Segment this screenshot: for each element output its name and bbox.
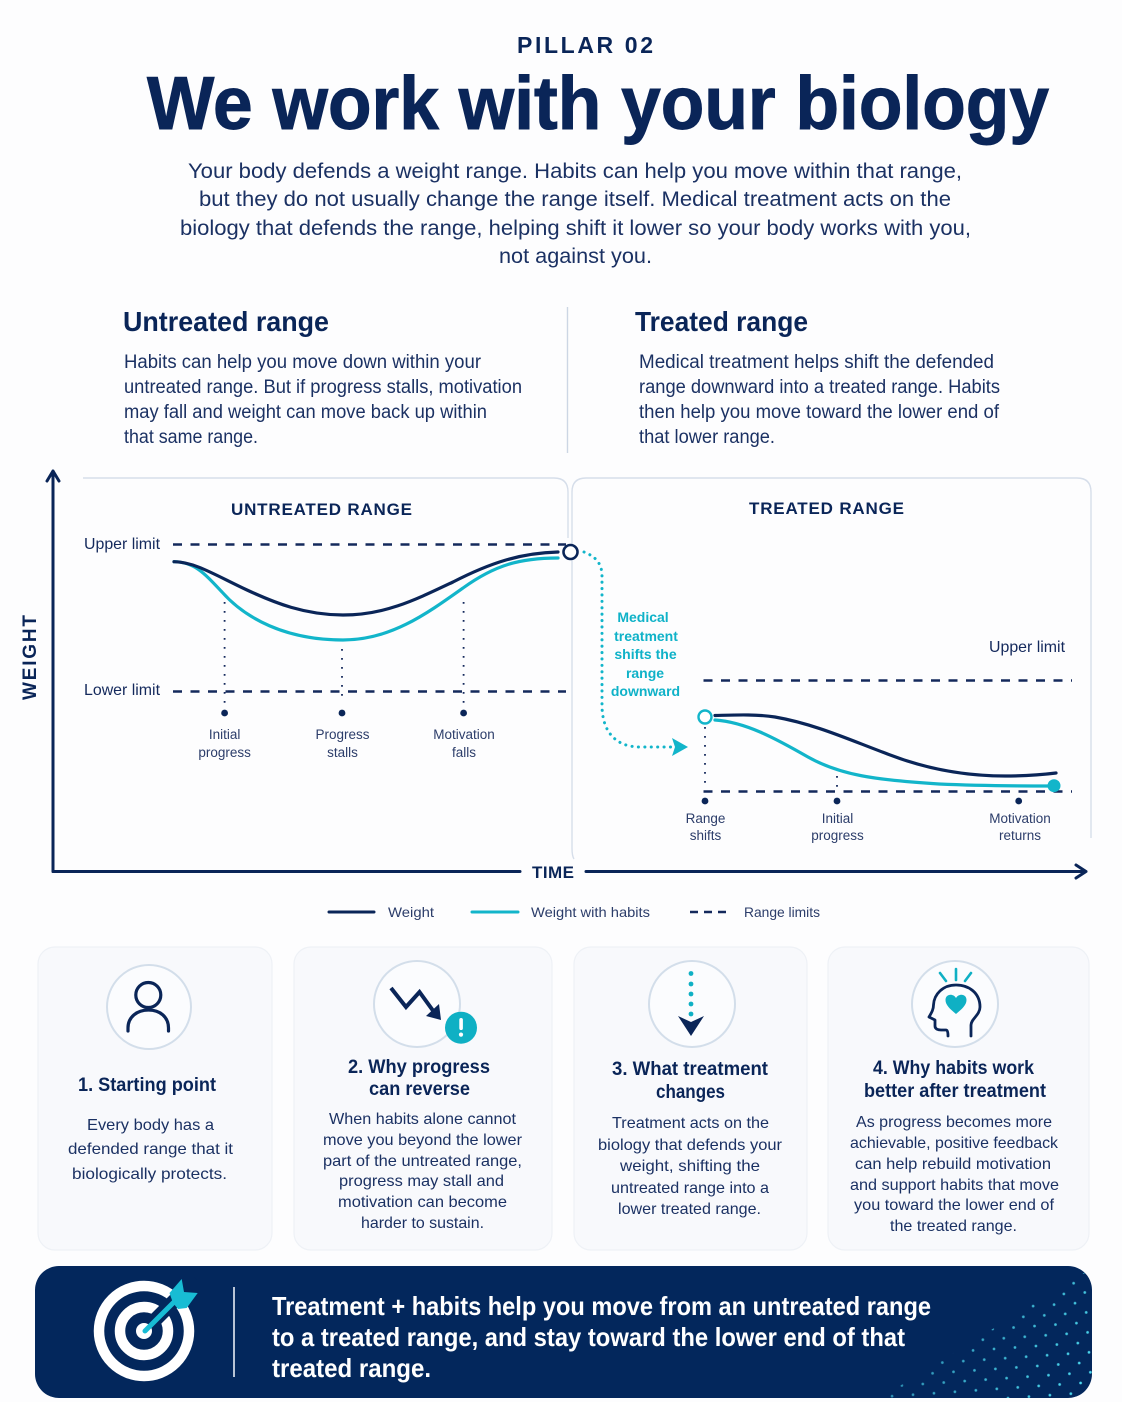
card body: move you beyond the lower	[323, 1132, 523, 1149]
range limit lines	[704, 680, 1072, 792]
panel: treated range chart	[572, 478, 1091, 859]
legend: Range limits	[744, 904, 820, 920]
description: untreated range: Habits can help you move down within your	[124, 352, 482, 373]
icon: person	[107, 965, 191, 1049]
banner text	[272, 1291, 931, 1383]
intro paragraph: Your body defends a weight range. Habits can help you move within that range,	[188, 160, 962, 183]
card body: harder to sustain.	[361, 1215, 484, 1232]
callout: medical treatment shifts the range downward: treatment	[614, 628, 678, 644]
intro paragraph: but they do not usually change the range itself. Medical treatment acts on the	[199, 188, 951, 211]
card body: biology that defends your	[598, 1137, 783, 1154]
description: treated range	[639, 352, 1000, 448]
marker label: progress stalls: stalls	[327, 745, 358, 760]
callout: medical treatment shifts the range downward: range	[626, 665, 664, 681]
panel: 4. why habits work better after treatment	[828, 947, 1089, 1250]
icon: head with heart	[912, 961, 998, 1047]
banner text: treated range.	[272, 1353, 431, 1383]
intro paragraph	[180, 160, 971, 268]
heading: untreated range: Untreated range	[123, 306, 329, 337]
transition point: untreated top	[564, 545, 578, 559]
marker label: range shifts	[686, 811, 725, 843]
legend	[329, 904, 820, 920]
card body: lower treated range.	[618, 1201, 761, 1218]
title: We work with your biology	[147, 61, 1049, 145]
chart heading: untreated range: UNTREATED RANGE	[231, 500, 412, 519]
icon: dotted down arrow	[649, 961, 735, 1047]
marker label: initial progress: Initial	[822, 811, 853, 826]
icon: falling trend with alert	[374, 961, 477, 1047]
card heading: 3. What treatment	[612, 1058, 768, 1080]
marker label: motivation returns: Motivation	[989, 811, 1051, 826]
card heading: changes	[656, 1081, 725, 1103]
card body: weight, shifting the	[619, 1158, 760, 1175]
chart: weight over time	[20, 471, 1091, 882]
panel: untreated range chart	[83, 478, 568, 760]
card heading: 4. Why habits work	[873, 1057, 1034, 1079]
card body: biologically protects.	[72, 1166, 227, 1183]
marker label: initial progress	[811, 811, 864, 843]
card heading	[612, 1058, 768, 1103]
card body: Treatment acts on the	[612, 1115, 769, 1132]
description: treated range: range downward into a treated range. Habits	[639, 377, 1000, 398]
marker label: motivation returns	[989, 811, 1051, 843]
label: lower limit: Lower limit	[84, 682, 161, 699]
card body: When habits alone cannot	[329, 1111, 517, 1128]
curve: weight	[174, 552, 558, 615]
markers	[702, 727, 1022, 804]
intro paragraph: not against you.	[499, 245, 652, 268]
callout: medical treatment shifts the range downward: shifts the	[614, 646, 677, 662]
card body: untreated range into a	[611, 1180, 769, 1197]
card body: part of the untreated range,	[323, 1153, 522, 1170]
description: untreated range: may fall and weight can move back up within	[124, 402, 487, 423]
banner text: to a treated range, and stay toward the lower end of that	[272, 1322, 905, 1352]
card body: As progress becomes more	[856, 1114, 1052, 1131]
card heading: can reverse	[369, 1078, 470, 1100]
y axis	[47, 471, 59, 872]
marker label: motivation falls: falls	[452, 745, 476, 760]
label: upper limit: Upper limit	[84, 536, 161, 553]
marker label: initial progress	[198, 727, 251, 760]
card heading	[348, 1056, 490, 1100]
legend: Weight with habits	[531, 904, 650, 920]
curve: weight with habits	[174, 558, 558, 640]
description: untreated range: that same range.	[124, 427, 258, 448]
chart heading: treated range: TREATED RANGE	[749, 499, 904, 518]
label: upper limit: Upper limit	[989, 639, 1066, 656]
text block: untreated range	[123, 306, 522, 448]
panel: 2. why progress can reverse	[294, 947, 552, 1250]
marker label: progress stalls	[315, 727, 370, 760]
callout: medical treatment shifts the range downward	[611, 609, 680, 699]
end point: treated	[1048, 779, 1060, 792]
card heading	[864, 1057, 1046, 1102]
callout: medical treatment shifts the range downward: downward	[611, 683, 680, 699]
card heading: 1. Starting point	[78, 1074, 216, 1096]
card body: defended range that it	[68, 1141, 234, 1158]
heading: treated range: Treated range	[635, 306, 808, 337]
intro paragraph: biology that defends the range, helping shift it lower so your body works with you,	[180, 217, 971, 240]
card heading: 2. Why progress	[348, 1056, 490, 1078]
card body: motivation can become	[338, 1194, 507, 1211]
text block: treated range	[635, 306, 1000, 448]
start point: treated	[698, 710, 712, 724]
marker label: motivation falls: Motivation	[433, 727, 495, 742]
marker label: initial progress: progress	[811, 828, 864, 843]
description: untreated range	[124, 352, 522, 448]
arrow: treatment shifts range down	[584, 552, 688, 756]
icon: target with dart	[99, 1279, 198, 1376]
description: treated range: then help you move toward the lower end of	[639, 402, 1000, 423]
marker label: initial progress: progress	[198, 745, 251, 760]
range limit lines	[173, 544, 566, 692]
legend: Weight	[388, 904, 434, 920]
y axis label: WEIGHT	[20, 615, 41, 700]
banner text: Treatment + habits help you move from an untreated range	[272, 1291, 931, 1321]
card body: Every body has a	[87, 1117, 214, 1134]
card body: the treated range.	[890, 1218, 1017, 1235]
panel: 3. what treatment changes	[574, 947, 807, 1250]
card body: you toward the lower end of	[854, 1197, 1055, 1214]
marker label: initial progress: Initial	[209, 727, 240, 742]
curve: weight	[715, 715, 1056, 776]
card body: can help rebuild motivation	[855, 1156, 1051, 1173]
callout: medical treatment shifts the range downward: Medical	[617, 609, 669, 625]
card body	[850, 1114, 1059, 1235]
description: treated range: Medical treatment helps shift the defended	[639, 352, 994, 373]
card heading: better after treatment	[864, 1080, 1046, 1102]
card body: progress may stall and	[339, 1173, 504, 1190]
marker label: range shifts: shifts	[690, 828, 722, 843]
panel: 1. starting point	[38, 947, 272, 1250]
marker label: progress stalls: Progress	[315, 727, 370, 742]
card body: and support habits that move	[850, 1177, 1059, 1194]
banner: key takeaway	[35, 1266, 1092, 1398]
card body	[323, 1111, 523, 1232]
x axis label: TIME	[532, 863, 574, 882]
curve: weight with habits	[715, 720, 1052, 786]
markers	[221, 602, 467, 716]
marker label: motivation returns: returns	[999, 828, 1041, 843]
x axis	[53, 865, 1086, 878]
card body	[598, 1115, 783, 1218]
marker label: range shifts: Range	[686, 811, 725, 826]
marker label: motivation falls	[433, 727, 495, 760]
description: treated range: that lower range.	[639, 427, 775, 448]
card body	[68, 1117, 234, 1183]
card body: achievable, positive feedback	[850, 1135, 1059, 1152]
description: untreated range: untreated range. But if progress stalls, motivation	[124, 377, 522, 398]
eyebrow: Pillar 02: PILLAR 02	[517, 32, 653, 58]
